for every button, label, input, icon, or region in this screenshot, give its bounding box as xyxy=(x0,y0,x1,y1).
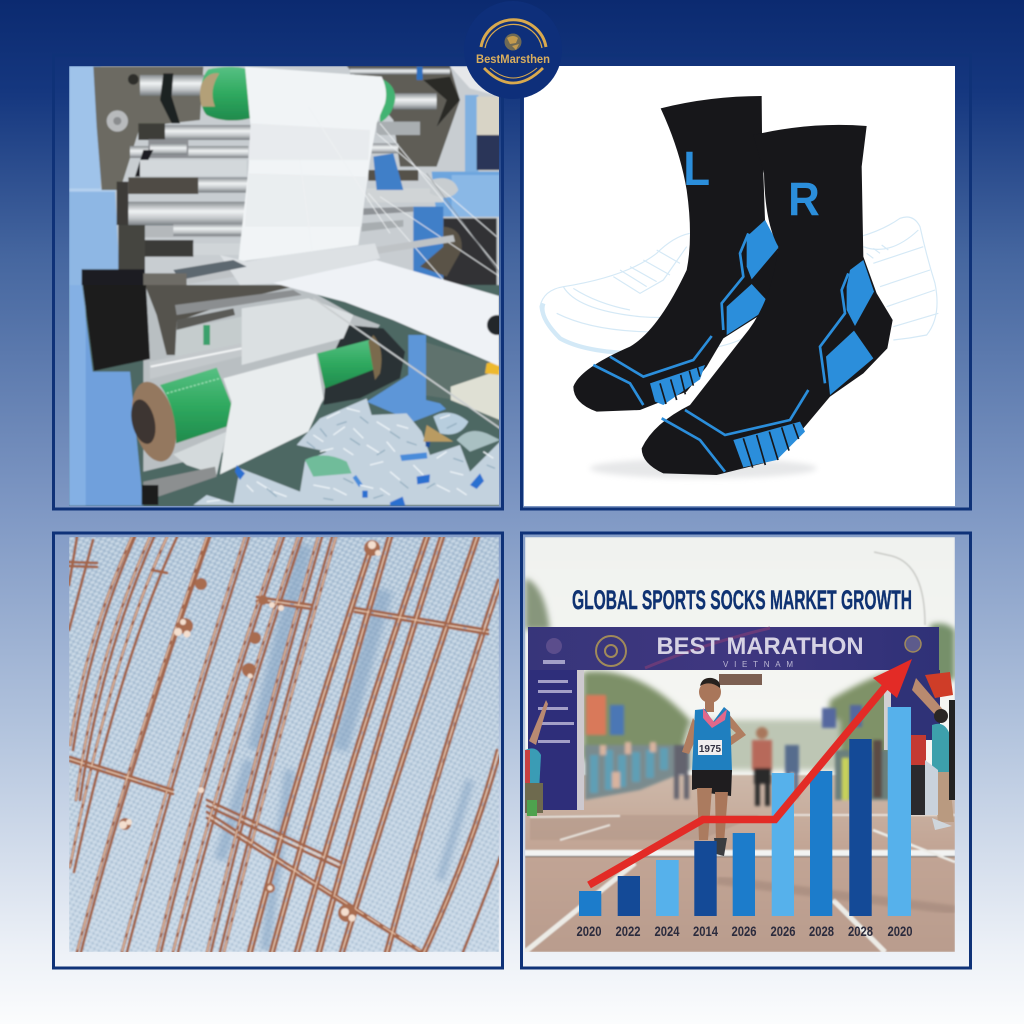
sock letter L: L xyxy=(683,142,710,196)
year axis labels: 2028 xyxy=(848,923,873,939)
white film on spool xyxy=(220,353,323,474)
panel: copper fibre fabric xyxy=(54,533,502,968)
year axis labels xyxy=(576,923,913,939)
spectators left xyxy=(525,700,548,816)
year axis labels: 2024 xyxy=(654,923,680,939)
recycled plastic bottles xyxy=(193,398,500,506)
brown wheel xyxy=(131,381,177,462)
blurred crowd xyxy=(585,695,890,806)
machine photo lower part xyxy=(60,285,500,507)
copper knots xyxy=(119,540,381,922)
black control box xyxy=(83,285,150,371)
copper strands xyxy=(69,537,501,952)
logo wordmark: BestMarsthen xyxy=(476,52,550,66)
darker fabric folds xyxy=(220,545,470,950)
year axis labels: 2026 xyxy=(732,923,757,939)
year axis labels: 2020 xyxy=(576,923,602,939)
runner bib number: 1975 xyxy=(699,744,722,755)
knitted fabric base xyxy=(69,537,499,952)
finish arch xyxy=(528,627,940,810)
left sock xyxy=(573,96,779,412)
sock letter R: R xyxy=(788,173,820,226)
arch sub-heading: VIETNAM xyxy=(723,660,793,669)
year axis labels: 2026 xyxy=(770,923,796,939)
film sheet thread xyxy=(313,298,500,428)
runner xyxy=(682,678,746,856)
icon: left running shoe outline xyxy=(540,233,747,353)
year axis labels: 2020 xyxy=(888,923,913,939)
translucent film web xyxy=(238,67,386,262)
soft shadow xyxy=(590,458,817,478)
green spool lower xyxy=(160,368,232,443)
panel: recycling machine xyxy=(54,55,507,509)
marathon photo background xyxy=(525,537,955,952)
logo globe xyxy=(504,34,522,50)
blue machine column xyxy=(69,285,143,506)
year axis labels: 2014 xyxy=(693,923,718,939)
steel roller with film xyxy=(150,350,241,378)
panel: market growth chart over marathon photo xyxy=(522,533,970,968)
panel: sports socks xyxy=(522,55,970,509)
banner logos xyxy=(596,636,626,666)
film sheet crossing the machine xyxy=(273,260,499,366)
year axis labels: 2028 xyxy=(809,923,834,939)
green spool top xyxy=(201,67,250,121)
logo badge xyxy=(464,1,562,99)
year axis labels: 2022 xyxy=(616,923,641,939)
bar chart xyxy=(579,707,911,916)
arrow: red growth line xyxy=(589,659,912,885)
machine photo upper part xyxy=(69,66,500,289)
lower roller xyxy=(187,235,455,284)
icon: right running shoe outline xyxy=(860,217,938,340)
arch heading: BEST MARATHON xyxy=(656,633,864,660)
logo rings xyxy=(481,20,546,83)
race clock xyxy=(719,674,762,685)
right sock xyxy=(642,125,893,475)
spectators right xyxy=(911,672,955,830)
